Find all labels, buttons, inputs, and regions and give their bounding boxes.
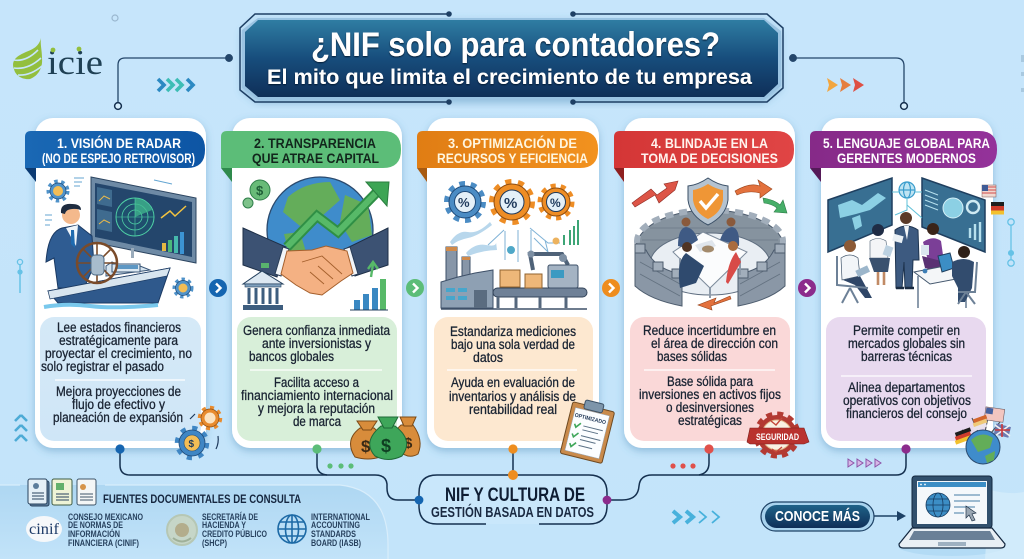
title text: ¿NIF solo para contadores?: [311, 26, 720, 64]
arrow button 3: [602, 279, 620, 297]
card 3: [417, 118, 599, 448]
machine: [548, 265, 578, 288]
bullet text 2: bancos globales: [249, 349, 334, 364]
tab heading 3: [417, 131, 598, 182]
bullet text 5: Permite competir en: [853, 323, 960, 338]
panel: document sources: [0, 479, 388, 559]
conveyor: [493, 288, 587, 297]
arrow button 1: [209, 279, 227, 297]
card 2: [221, 118, 402, 448]
tab heading 1: (NO DE ESPEJO RETROVISOR): [42, 151, 195, 166]
person: center: [892, 212, 919, 288]
boxes: [500, 270, 520, 287]
shield: [688, 178, 728, 225]
illustration: globe and handshake: [243, 177, 389, 310]
illustration: global team: [828, 178, 1004, 308]
bullet text 2: de marca: [293, 414, 341, 429]
bullet text 4: el área de dirección con: [651, 336, 778, 351]
button: conoce más: [761, 502, 874, 531]
bullet text 4: [639, 323, 781, 428]
wall back: [636, 210, 784, 286]
decoration: left chevrons: [15, 415, 27, 441]
logo: icie: [13, 38, 103, 82]
man: [46, 225, 94, 288]
screens: [828, 178, 892, 252]
text: CINIF: [68, 512, 143, 548]
bullet text 3: [447, 324, 577, 417]
bullet text 1: estratégicamente para: [59, 333, 178, 348]
logo: IASB globe: [278, 515, 306, 543]
icon: globe with flags: [955, 407, 1011, 464]
wheel: [77, 243, 117, 283]
connector dots: [115, 444, 911, 454]
ship: [106, 262, 150, 276]
icon: security seal: SEGURIDAD: [756, 432, 799, 442]
bullet text 1: solo registrar el pasado: [41, 359, 164, 374]
bullet text 1: Mejora proyecciones de: [56, 384, 181, 399]
factory: [446, 247, 457, 283]
button: conoce más: CONOCE MÁS: [775, 508, 860, 525]
central box text line 2: GESTIÓN BASADA EN DATOS: [431, 503, 594, 521]
illustration: globe and handshake: $: [256, 183, 264, 198]
bullet text 3: inventarios y análisis de: [449, 389, 576, 404]
illustration: gears and factory: %: [550, 196, 561, 210]
dots: red: [670, 463, 696, 469]
tab heading 1: 1. VISIÓN DE RADAR: [57, 136, 181, 151]
robot arm: [530, 254, 568, 270]
sleeves: [243, 228, 286, 277]
logo: cinif: [26, 516, 62, 542]
hands: [281, 246, 353, 295]
bullet text 5: financieros del consejo: [846, 406, 967, 421]
text panel 4: [630, 317, 790, 441]
bullet text 3: bajo una sola verdad de: [451, 337, 575, 352]
text panel 1: [40, 317, 201, 441]
illustration: gears and factory: %: [458, 195, 470, 210]
tab heading 5: [810, 131, 997, 182]
card 5: [810, 118, 1004, 448]
logo: SHCP emblem: [167, 515, 197, 545]
bullet text 1: planeación de expansión: [53, 410, 183, 425]
icon: clipboard: OPTIMIZADO: [574, 413, 607, 426]
bullet text 5: barreras técnicas: [861, 349, 952, 364]
gears: [447, 184, 483, 220]
connector lines bottom: [120, 449, 906, 500]
dots: green: [327, 463, 354, 469]
arrow to laptop: [874, 511, 906, 521]
bullet text 2: [241, 323, 393, 429]
icon: clipboard: [560, 397, 616, 464]
tab heading 2: 2. TRANSPARENCIA: [254, 136, 376, 151]
bullet text 3: Ayuda en evaluación de: [451, 375, 575, 390]
chevrons: top left: [158, 79, 193, 91]
decorative circle: [112, 15, 118, 21]
bullet text 4: Reduce incertidumbre en: [643, 323, 776, 338]
bars: [354, 300, 360, 310]
bullet text 4: estratégicas: [678, 413, 742, 428]
heading: sources: FUENTES DOCUMENTALES DE CONSULTA: [103, 492, 301, 506]
text: IASB: ACCOUNTING: [311, 520, 360, 530]
bank: [243, 271, 283, 284]
table and person right: [914, 246, 977, 308]
tab heading 3: 3. OPTIMIZACIÓN DE: [448, 136, 577, 151]
icon: money bags: $: [404, 435, 413, 452]
text: SHCP: SECRETARÍA DE: [202, 512, 258, 522]
table: [673, 232, 747, 288]
bullet text 5: Alinea departamentos: [848, 380, 965, 395]
person: woman: [869, 224, 893, 285]
subtitle text: El mito que limita el crecimiento de tu empresa: [267, 66, 752, 89]
bullet text 5: mercados globales sin: [848, 336, 965, 351]
bullet text 2: y mejora la reputación: [258, 401, 375, 416]
tab heading 2: [221, 131, 401, 182]
bullet text 5: [841, 323, 972, 421]
illustration: radar and ship: [44, 177, 196, 307]
decoration: left line: [17, 259, 23, 293]
triangles: purple: [848, 459, 881, 467]
bullet text 3: Estandariza mediciones: [450, 324, 576, 339]
coins: [250, 180, 270, 200]
bullet text 4: Base sólida para: [667, 374, 753, 389]
arrow button 4: [798, 279, 816, 297]
illustration: gears and factory: %: [504, 195, 517, 212]
text: SHCP: (SHCP): [202, 538, 227, 548]
text: SHCP: HACIENDA Y: [202, 520, 246, 530]
globe: [899, 182, 915, 198]
logo: cinif: cinif: [29, 521, 60, 538]
text panel 5: [826, 317, 986, 441]
gears: [48, 182, 68, 200]
logo: icie: icie: [47, 43, 103, 82]
chevrons: bottom: [673, 511, 719, 523]
decoration: right line: [1008, 219, 1014, 266]
icon: laptop: [898, 476, 1024, 559]
text: IASB: INTERNATIONAL: [311, 512, 370, 522]
bullet text 1: [41, 320, 192, 425]
text: IASB: STANDARDS: [311, 529, 356, 539]
icon: growth gears: [178, 408, 220, 458]
bullet text 5: operativos con objetivos: [843, 393, 971, 408]
connector: title right: [790, 55, 907, 109]
text: CINIF: DE NORMAS DE: [68, 520, 123, 530]
text: SHCP: [202, 512, 267, 548]
text: CINIF: FINANCIERA (CINIF): [68, 538, 139, 548]
growth arrow: [287, 191, 378, 247]
card 4: [614, 118, 795, 448]
bullet text 3: rentabilidad real: [469, 402, 557, 417]
text panel 2: [237, 317, 397, 441]
title banner: [240, 11, 783, 105]
tab heading 5: GERENTES MODERNOS: [837, 151, 976, 166]
text: CINIF: INFORMACIÓN: [68, 528, 120, 539]
connector: title left: [115, 55, 232, 109]
tab heading 4: 4. BLINDAJE EN LA: [651, 136, 768, 151]
bullet text 2: Genera confianza inmediata: [243, 323, 390, 338]
text panel 3: [434, 317, 593, 441]
flags: [982, 185, 996, 197]
icon: money bags: [351, 417, 420, 460]
text: IASB: [311, 512, 370, 548]
tab heading 4: [614, 131, 794, 182]
person: seated left: [837, 240, 872, 303]
tab heading 1: [25, 131, 205, 182]
chevrons: top right: [827, 78, 864, 92]
bullet text 1: Lee estados financieros: [57, 320, 181, 335]
central box: NIF: [415, 470, 611, 524]
people: [682, 218, 690, 226]
bullet text 4: o desinversiones: [666, 400, 754, 415]
illustration: gears and factory: [441, 182, 587, 309]
illustration: fortress and shield: [632, 178, 787, 310]
icon: documents: [28, 479, 96, 506]
central box text line 1: NIF Y CULTURA DE: [445, 485, 585, 506]
wisps and circuit lines: [450, 222, 492, 245]
arrows: [632, 181, 678, 207]
bullet text 1: flujo de efectivo y: [72, 397, 165, 412]
bullet text 2: financiamiento internacional: [241, 388, 393, 403]
tab heading 4: TOMA DE DECISIONES: [641, 151, 778, 166]
bullet text 1: proyectar el crecimiento, no: [45, 346, 192, 361]
bullet text 2: Facilita acceso a: [274, 375, 359, 390]
icon: money bags: $: [361, 437, 371, 456]
text: CINIF: CONSEJO MEXICANO: [68, 512, 143, 522]
front walls: [635, 246, 682, 306]
bullet text 4: bases sólidas: [657, 349, 727, 364]
icon: growth gears: $: [188, 439, 194, 450]
tab heading 5: 5. LENGUAJE GLOBAL PARA: [823, 136, 990, 151]
tab heading 3: RECURSOS Y EFICIENCIA: [437, 151, 588, 166]
bullet text 3: datos: [473, 350, 503, 365]
bullet text 2: ante inversionistas y: [262, 336, 371, 351]
bullet text 4: inversiones en activos fijos: [639, 387, 781, 402]
tab heading 2: QUE ATRAE CAPITAL: [252, 151, 379, 166]
text: IASB: BOARD (IASB): [311, 538, 361, 548]
text: SHCP: CREDITO PÚBLICO: [202, 528, 267, 539]
arrow button 2: [406, 279, 424, 297]
icon: money bags: $: [381, 436, 391, 456]
decoration: right edge: [1021, 55, 1024, 92]
card 1: [25, 118, 206, 448]
person: woman right: [921, 223, 945, 272]
icon: security seal: [747, 414, 809, 456]
